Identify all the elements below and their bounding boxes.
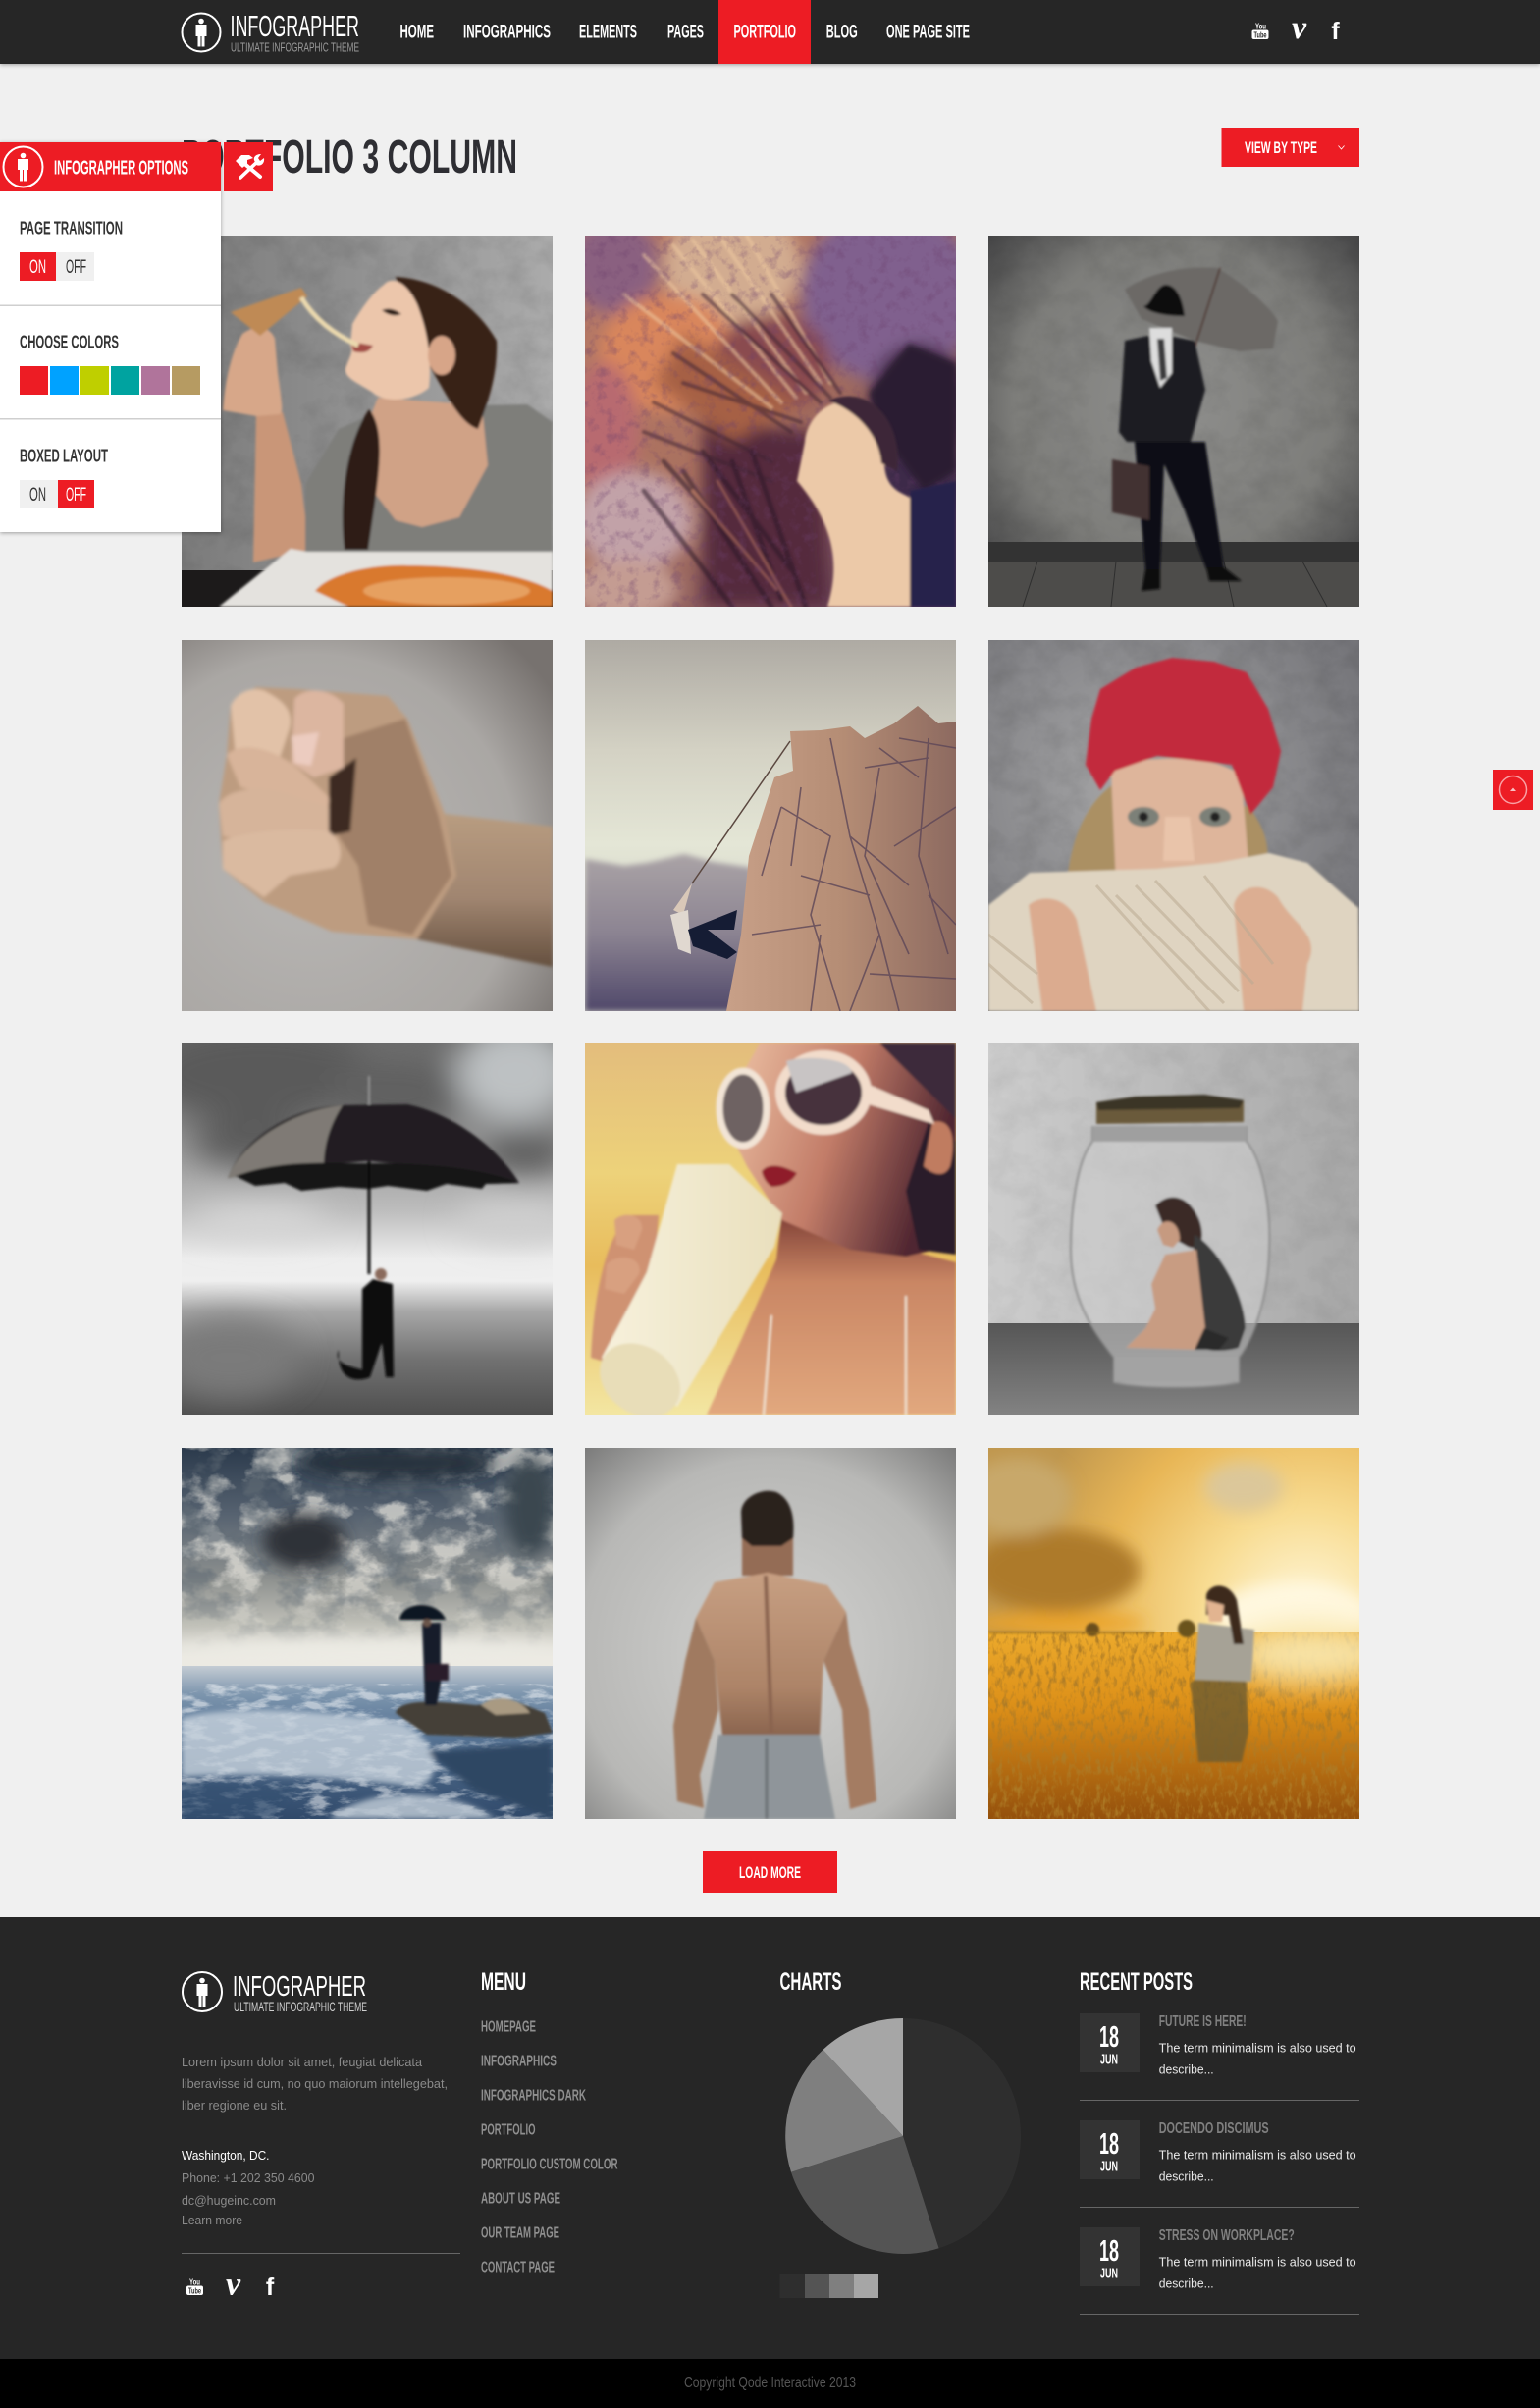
footer social icons: You xyxy=(189,2277,200,2287)
social icons: f xyxy=(1331,18,1340,45)
photo: headless man with umbrella xyxy=(988,236,1359,607)
options panel xyxy=(0,142,273,532)
post 2: JUN xyxy=(1100,2160,1118,2175)
photo: clenched fist xyxy=(182,640,553,1011)
copyright bar: Copyright Qode Interactive 2013 xyxy=(684,2375,856,2391)
social icons xyxy=(1252,10,1340,46)
photo: woman in red hat and scarf xyxy=(988,640,1359,1011)
menu column xyxy=(481,1968,618,2275)
contact details: Learn more xyxy=(182,2214,242,2227)
photo: rock climber xyxy=(585,640,956,1011)
post 3: describe... xyxy=(1159,2277,1214,2291)
page title: PORTFOLIO 3 COLUMN xyxy=(182,131,517,184)
menu column: ABOUT US PAGE xyxy=(481,2191,560,2207)
navigation: ELEMENTS xyxy=(579,22,637,43)
photo: woman in wheat field xyxy=(988,1448,1359,1819)
navigation xyxy=(400,22,970,43)
contact details xyxy=(182,2149,315,2227)
page transition option xyxy=(20,218,123,281)
photo: abstract hair splash xyxy=(585,236,956,607)
social icons: Tube xyxy=(1254,31,1267,39)
photo: man on rock in stormy sea xyxy=(182,1448,553,1819)
pie chart xyxy=(785,2018,1021,2254)
post 1: 18 xyxy=(1099,2019,1119,2054)
contact details: dc@hugeinc.com xyxy=(182,2194,276,2208)
about text: liberavisse id cum, no quo maiorum intellegebat, xyxy=(182,2077,448,2091)
footer social icons: Tube xyxy=(188,2287,201,2295)
photo: woman eating pizza xyxy=(182,236,553,607)
about text: Lorem ipsum dolor sit amet, feugiat delicata xyxy=(182,2056,422,2069)
footer logo: ULTIMATE INFOGRAPHIC THEME xyxy=(234,1999,367,2014)
post 2 xyxy=(1080,2120,1359,2208)
navigation: HOME xyxy=(400,22,434,43)
charts column: CHARTS xyxy=(779,1968,842,1996)
active nav highlight xyxy=(718,0,811,64)
boxed layout option: BOXED LAYOUT xyxy=(20,446,108,465)
view by type button: VIEW BY TYPE xyxy=(1245,139,1317,157)
footer social icons: f xyxy=(266,2274,275,2301)
charts column xyxy=(779,1968,1021,2298)
contact details: Washington, DC. xyxy=(182,2149,269,2163)
footer logo xyxy=(183,1971,367,2014)
logo: INFOGRAPHER xyxy=(230,10,359,43)
view by type button xyxy=(1221,128,1359,167)
chart legend xyxy=(779,2274,878,2298)
recent posts column: RECENT POSTS xyxy=(1080,1968,1193,1996)
post 2: describe... xyxy=(1159,2170,1214,2184)
post 3: The term minimalism is also used to xyxy=(1159,2256,1356,2270)
post 3: STRESS ON WORKPLACE? xyxy=(1159,2227,1295,2244)
page transition option: OFF xyxy=(66,257,86,278)
post 2: The term minimalism is also used to xyxy=(1159,2149,1356,2163)
post 2: 18 xyxy=(1099,2126,1119,2161)
post 1: The term minimalism is also used to xyxy=(1159,2042,1356,2056)
menu column: CONTACT PAGE xyxy=(481,2260,555,2275)
portfolio grid xyxy=(142,206,1396,1819)
navigation: BLOG xyxy=(826,22,858,43)
tools toggle icon xyxy=(224,142,273,191)
boxed layout option xyxy=(20,446,108,508)
menu column: INFOGRAPHICS DARK xyxy=(481,2087,586,2105)
footer social icons xyxy=(186,2266,275,2303)
load more button: LOAD MORE xyxy=(739,1864,801,1882)
copyright bar xyxy=(0,2359,1540,2408)
menu column: OUR TEAM PAGE xyxy=(481,2224,559,2242)
menu column: HOMEPAGE xyxy=(481,2018,536,2036)
post 3 xyxy=(1080,2227,1359,2315)
about text xyxy=(182,2056,448,2113)
menu column: MENU xyxy=(481,1968,526,1996)
post 1 xyxy=(1080,2013,1359,2101)
options panel header: INFOGRAPHER OPTIONS xyxy=(54,157,188,179)
navigation: PORTFOLIO xyxy=(734,22,796,43)
choose colors option xyxy=(20,332,200,395)
back to top button xyxy=(1493,770,1533,810)
menu column: PORTFOLIO CUSTOM COLOR xyxy=(481,2156,618,2173)
page transition option: ON xyxy=(29,257,46,278)
post 2: DOCENDO DISCIMUS xyxy=(1159,2120,1269,2137)
post 3: 18 xyxy=(1099,2233,1119,2268)
social icons: v xyxy=(1292,10,1307,46)
recent posts column xyxy=(1080,1968,1359,2315)
choose colors option: CHOOSE COLORS xyxy=(20,332,119,351)
footer social icons: v xyxy=(226,2266,241,2303)
post 1: JUN xyxy=(1100,2053,1118,2068)
contact details: Phone: +1 202 350 4600 xyxy=(182,2171,315,2185)
photo: man with giant umbrella xyxy=(182,1043,553,1415)
menu column: PORTFOLIO xyxy=(481,2122,536,2138)
boxed layout option: OFF xyxy=(66,485,86,506)
boxed layout option: ON xyxy=(29,485,46,506)
post 1: FUTURE IS HERE! xyxy=(1159,2013,1247,2030)
post 1: describe... xyxy=(1159,2063,1214,2077)
page transition option: PAGE TRANSITION xyxy=(20,218,123,238)
social icons: You xyxy=(1255,22,1266,31)
photo: woman with sunglasses and cup xyxy=(585,1043,956,1432)
logo xyxy=(183,10,359,55)
logo: ULTIMATE INFOGRAPHIC THEME xyxy=(231,39,359,55)
navigation: INFOGRAPHICS xyxy=(463,22,551,43)
menu column: INFOGRAPHICS xyxy=(481,2054,557,2069)
photo: man's bare back xyxy=(585,1448,956,1819)
load more button xyxy=(703,1851,837,1893)
photo: woman in glass jar xyxy=(988,1043,1359,1415)
navigation: PAGES xyxy=(667,22,704,43)
post 3: JUN xyxy=(1100,2267,1118,2282)
footer xyxy=(0,1917,1540,2359)
footer logo: INFOGRAPHER xyxy=(233,1971,366,2003)
header bar xyxy=(0,0,1540,64)
navigation: ONE PAGE SITE xyxy=(886,22,970,43)
about text: liber regione eu sit. xyxy=(182,2099,287,2113)
options panel header xyxy=(0,142,221,191)
